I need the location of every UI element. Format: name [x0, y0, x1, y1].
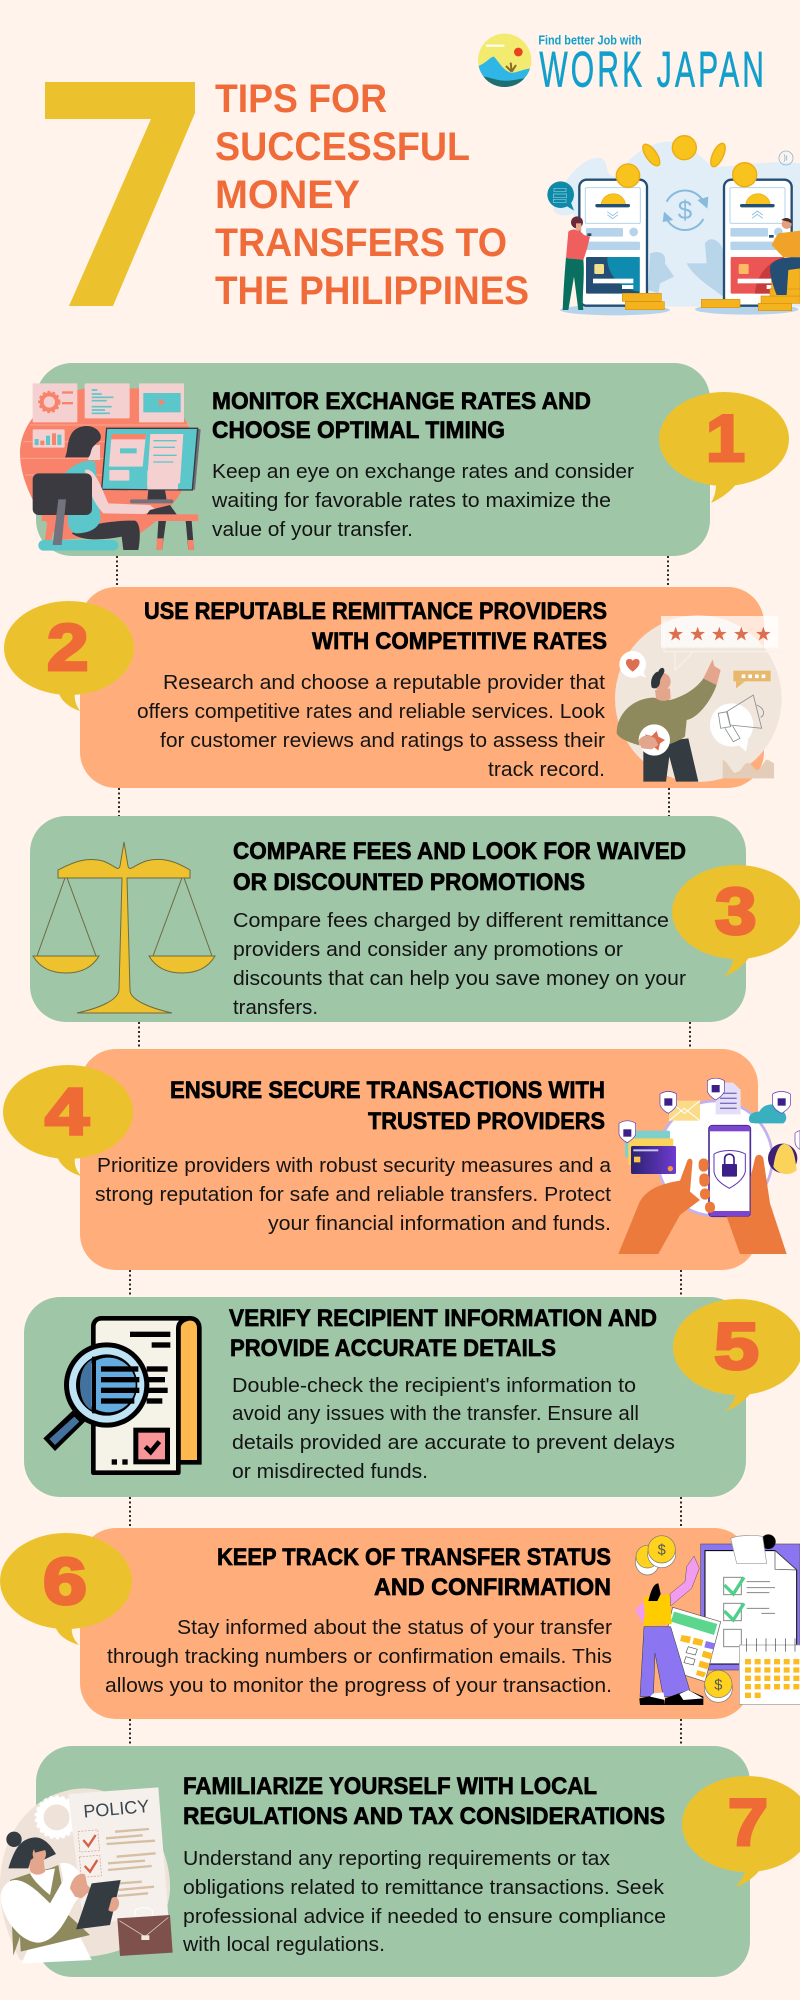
body text [232, 1374, 675, 1483]
heading: FAMILIARIZE YOURSELF WITH LOCAL [183, 1773, 597, 1800]
icon: woman with checklist, calculator and calendar [635, 1534, 800, 1705]
panel: tip 4 [3, 1049, 800, 1270]
body text [137, 671, 606, 781]
logo text: Find better Job with [538, 33, 642, 47]
left phone [579, 180, 647, 306]
right phone [724, 180, 792, 306]
chat bubble [547, 181, 574, 211]
number bubble 6: 6 [43, 1544, 87, 1618]
icon: woman with checklist, calculator and calendar: $ [714, 1677, 722, 1693]
body text [211, 460, 634, 541]
heading: AND CONFIRMATION [374, 1574, 611, 1601]
heading: TRUSTED PROVIDERS [368, 1108, 605, 1135]
body text: providers and consider any promotions or [233, 938, 623, 961]
body text [233, 909, 686, 1019]
heading: REGULATIONS AND TAX CONSIDERATIONS [183, 1803, 665, 1830]
number bubble 5: 5 [714, 1309, 759, 1383]
body text: offers competitive rates and reliable services. Look [137, 700, 606, 723]
heading [170, 1077, 605, 1135]
panel: tip 2 [4, 587, 782, 788]
body text: your financial information and funds. [268, 1212, 611, 1235]
body text: waiting for favorable rates to maximize the [211, 489, 611, 512]
heading: KEEP TRACK OF TRANSFER STATUS [217, 1544, 611, 1571]
body text: Research and choose a reputable provider that [163, 671, 605, 694]
title [215, 77, 529, 313]
body text: Compare fees charged by different remittance [233, 909, 669, 932]
body text [105, 1616, 612, 1697]
body text: Keep an eye on exchange rates and consider [212, 460, 634, 483]
body text [182, 1847, 666, 1956]
logo: Work Japan [478, 34, 762, 88]
heading [217, 1544, 611, 1601]
number bubble 1: 1 [706, 401, 745, 475]
body text: or misdirected funds. [232, 1460, 428, 1483]
heading [183, 1773, 665, 1830]
heading [212, 388, 591, 444]
body text: for customer reviews and ratings to assess their [160, 729, 605, 752]
body text: through tracking numbers or confirmation emails. This [107, 1645, 612, 1668]
heading: ENSURE SECURE TRANSACTIONS WITH [170, 1077, 605, 1104]
number bubble 1 [659, 392, 789, 503]
title: THE PHILIPPINES [215, 269, 529, 313]
heading: CHOOSE OPTIMAL TIMING [212, 417, 505, 444]
body text: discounts that can help you save money on your [233, 967, 686, 990]
body text: obligations related to remittance transactions. Seek [183, 1876, 665, 1899]
number bubble 3 [672, 865, 800, 976]
title: SUCCESSFUL [215, 125, 470, 169]
heading [229, 1305, 657, 1362]
coin stacks [622, 268, 800, 311]
coins [616, 136, 757, 187]
exchange cycle with dollar sign [663, 191, 708, 230]
icon: man pointing at star rating [615, 615, 782, 782]
number bubble 3: 3 [715, 874, 756, 948]
body text: details provided are accurate to prevent delays [232, 1431, 675, 1454]
heading: WITH COMPETITIVE RATES [312, 628, 607, 655]
body text: Prioritize providers with robust security measures and a [97, 1154, 612, 1177]
body text: professional advice if needed to ensure compliance [183, 1905, 666, 1928]
icon: woman reviewing policy document: POLICY [83, 1796, 150, 1822]
title: TRANSFERS TO [215, 221, 507, 265]
illustration: money transfer between phones [547, 136, 800, 315]
panel: tip 5 [24, 1297, 800, 1497]
body text: allows you to monitor the progress of your transaction. [105, 1674, 612, 1697]
icon: balance scale [33, 842, 215, 1013]
exchange cycle with dollar sign: $ [678, 195, 693, 225]
number bubble 2 [4, 601, 134, 711]
number bubble 6 [0, 1533, 132, 1645]
signal icon [779, 151, 793, 165]
heading: MONITOR EXCHANGE RATES AND [212, 388, 591, 415]
panel: tip 6 [0, 1528, 800, 1719]
number bubble 4 [3, 1065, 133, 1176]
heading: VERIFY RECIPIENT INFORMATION AND [229, 1305, 657, 1332]
number bubble 4: 4 [45, 1074, 89, 1148]
logo emblem [478, 34, 532, 87]
body text: Understand any reporting requirements or tax [183, 1847, 611, 1870]
body text [95, 1154, 612, 1235]
number bubble 2: 2 [47, 610, 88, 684]
body text: Double-check the recipient's information to [232, 1374, 636, 1397]
panel: tip 3 [30, 816, 800, 1022]
heading: COMPARE FEES AND LOOK FOR WAIVED [233, 838, 686, 865]
body text: with local regulations. [182, 1933, 385, 1956]
title: MONEY [215, 173, 360, 217]
icon: woman with checklist, calculator and calendar: $ [658, 1543, 666, 1559]
body text: value of your transfer. [212, 518, 413, 541]
body text: transfers. [233, 996, 318, 1019]
heading: USE REPUTABLE REMITTANCE PROVIDERS [144, 598, 607, 625]
body text: track record. [488, 758, 605, 781]
body text: avoid any issues with the transfer. Ensure all [232, 1402, 639, 1425]
body text: strong reputation for safe and reliable transfers. Protect [95, 1183, 611, 1206]
title: TIPS FOR [215, 77, 387, 121]
heading: PROVIDE ACCURATE DETAILS [230, 1335, 556, 1362]
heading [144, 598, 607, 655]
logo text: WORK JAPAN [539, 42, 764, 98]
panel: tip 1 [20, 363, 789, 556]
icon: woman reviewing policy document [0, 1787, 173, 1963]
number bubble 7: 7 [728, 1785, 768, 1859]
panel: tip 7 [0, 1746, 800, 1977]
big yellow number 7 [45, 82, 195, 306]
number bubble 7 [682, 1776, 800, 1887]
number bubble 5 [673, 1299, 800, 1411]
heading [233, 838, 686, 896]
icon: phone security [618, 1078, 800, 1254]
icon: magnifier over document [43, 1318, 199, 1473]
icon: woman working at computer [20, 383, 201, 551]
heading: OR DISCOUNTED PROMOTIONS [233, 869, 585, 896]
man sitting with phone [769, 218, 800, 295]
body text: Stay informed about the status of your transfer [177, 1616, 612, 1639]
woman with phone [563, 216, 591, 310]
